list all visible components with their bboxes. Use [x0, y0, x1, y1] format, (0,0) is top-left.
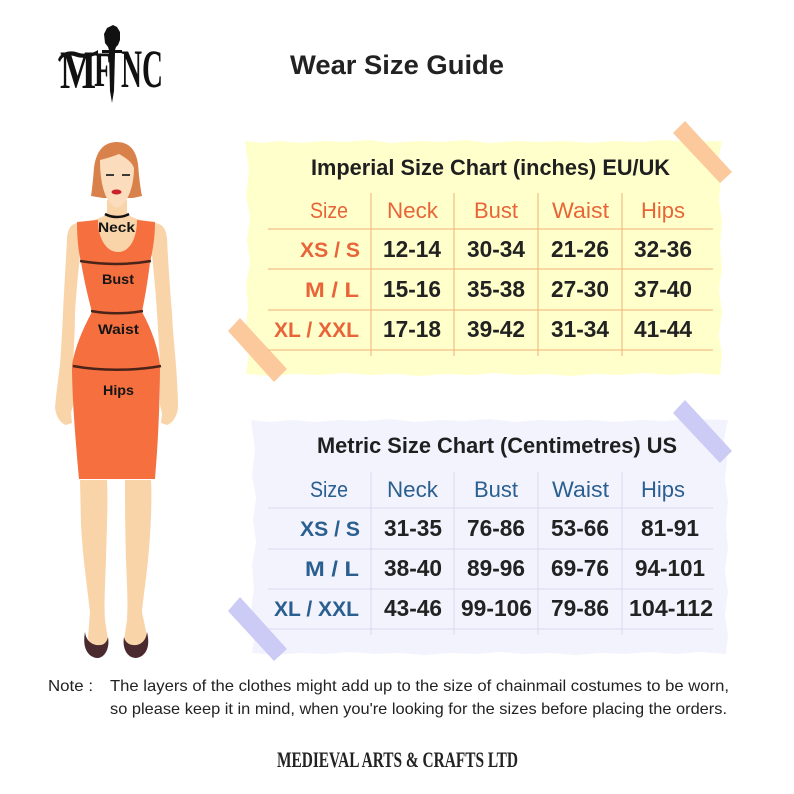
logo: MFINC sword emblem: NC: [121, 39, 163, 99]
header row: [310, 477, 685, 502]
row XS / S: 81-91: [641, 515, 699, 541]
row XL / XXL: 39-42: [467, 316, 525, 342]
row XL / XXL: 104-112: [629, 595, 713, 621]
tape top right: [673, 400, 732, 463]
row XS / S: XS / S: [300, 239, 360, 262]
row M / L: [305, 555, 705, 581]
header row: Waist: [552, 477, 609, 502]
bust line: [80, 261, 151, 264]
chart title: Metric Size Chart (Centimetres) US: [317, 433, 677, 458]
panel background lavender: [251, 419, 728, 655]
header row: [310, 198, 685, 223]
header row: Hips: [641, 198, 685, 223]
header row: Bust: [474, 477, 518, 502]
note text: so please keep it in mind, when you're looking for the sizes before placing the orders.: [110, 701, 727, 718]
figure dress: [72, 220, 160, 479]
header row: Hips: [641, 477, 685, 502]
row M / L: [305, 276, 692, 302]
header row: Neck: [387, 198, 439, 223]
label: Hips: Hips: [103, 382, 134, 398]
row M / L: 89-96: [467, 555, 525, 581]
logo: MFINC sword emblem: F: [94, 41, 111, 97]
row XS / S: [300, 236, 692, 262]
row XL / XXL: XL / XXL: [274, 319, 359, 342]
logo: MFINC sword emblem: M: [60, 40, 96, 100]
tape bottom left: [228, 318, 287, 382]
row XL / XXL: 41-44: [634, 316, 692, 342]
title: Wear Size Guide: [290, 50, 504, 80]
footer company name: MEDIEVAL ARTS & CRAFTS LTD: [277, 747, 518, 772]
row XL / XXL: 31-34: [551, 316, 609, 342]
row XL / XXL: XL / XXL: [274, 598, 359, 621]
row M / L: 38-40: [384, 555, 442, 581]
table grid: [268, 472, 713, 635]
header row: Size: [310, 198, 348, 223]
row XL / XXL: [274, 316, 692, 342]
row XS / S: 76-86: [467, 515, 525, 541]
row M / L: 94-101: [635, 555, 705, 581]
label: Neck: Neck: [98, 219, 135, 235]
row XL / XXL: 99-106: [461, 595, 532, 621]
figure hair: [91, 142, 142, 198]
row M / L: 15-16: [383, 276, 441, 302]
figure face: [100, 154, 134, 208]
row XS / S: XS / S: [300, 518, 360, 541]
row XL / XXL: 79-86: [551, 595, 609, 621]
header row: Bust: [474, 198, 518, 223]
row XS / S: 53-66: [551, 515, 609, 541]
logo: MFINC sword emblem: [58, 25, 163, 103]
note text: Note :: [48, 678, 93, 695]
hips line: [73, 366, 161, 370]
row XS / S: 12-14: [383, 236, 441, 262]
panel: metric size chart: [228, 400, 732, 661]
neck band: [105, 214, 129, 217]
panel: imperial size chart: [228, 121, 732, 382]
row XS / S: 31-35: [384, 515, 442, 541]
row XS / S: 21-26: [551, 236, 609, 262]
table grid: [268, 193, 713, 356]
row XS / S: 32-36: [634, 236, 692, 262]
row M / L: M / L: [305, 279, 359, 302]
header row: Neck: [387, 477, 439, 502]
row M / L: 35-38: [467, 276, 525, 302]
label: Waist: Waist: [98, 321, 139, 337]
row XS / S: [300, 515, 699, 541]
chart title: Imperial Size Chart (inches) EU/UK: [311, 155, 670, 180]
row XL / XXL: 43-46: [384, 595, 442, 621]
header row: Size: [310, 477, 348, 502]
row M / L: M / L: [305, 558, 359, 581]
row M / L: 69-76: [551, 555, 609, 581]
tape top right: [673, 121, 732, 183]
row M / L: 27-30: [551, 276, 609, 302]
tape bottom left: [228, 597, 287, 661]
row M / L: 37-40: [634, 276, 692, 302]
row XL / XXL: 17-18: [383, 316, 441, 342]
figure shoes: [84, 632, 148, 658]
row XL / XXL: [274, 595, 713, 621]
waist line: [91, 311, 143, 313]
row XS / S: 30-34: [467, 236, 525, 262]
header row: Waist: [552, 198, 609, 223]
panel background yellow: [245, 140, 722, 376]
figure skin: [55, 200, 178, 647]
note text: The layers of the clothes might add up to the size of chainmail costumes to be worn,: [110, 678, 729, 695]
figure: woman with measurement points: [55, 142, 178, 658]
label: Bust: Bust: [102, 271, 134, 287]
note text: [48, 678, 729, 718]
